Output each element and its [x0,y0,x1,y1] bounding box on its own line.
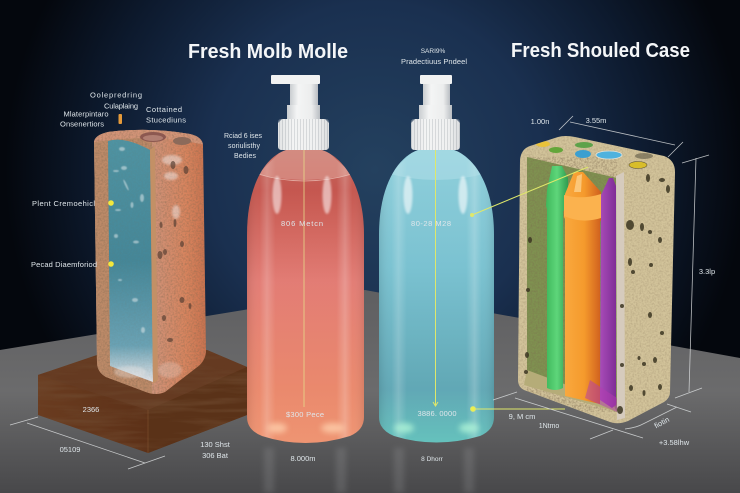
ceramic brick cross-section [94,130,206,394]
wooden base [38,350,247,453]
coloured tubes [546,166,617,412]
panel: brick sample on wooden base [10,90,247,469]
dimensions: wooden base [10,405,231,469]
dimension labels: fiotin [653,415,671,430]
bottle labels: $300 Pece [286,410,324,419]
callouts: brick [31,90,186,269]
top holes [536,141,653,168]
bottle labels: Pradectiuus Pndeel [401,57,467,66]
dimension labels: 9, M cm [509,412,535,421]
dimensions: wooden base: 05109 [60,445,80,454]
callouts: brick: Plent Cremoehicl [32,199,95,208]
bottle body [245,145,367,450]
dark speckles [524,174,670,414]
dimension labels: 3.3lp [699,267,715,276]
marker dots [108,200,114,267]
centre measure arrow [433,150,438,406]
bottle labels: SARI9% [421,48,445,55]
floor reflection [394,448,474,493]
side callout: Rciad 6 ises [224,133,262,140]
bottle labels: 8.000m [290,454,316,463]
bottle body [377,145,496,450]
callouts: brick: Mlaterpintaro [64,110,108,118]
leader line to case and dot [470,167,588,411]
panel: speckled shoulder case [470,116,715,447]
panel: blue pump bottle [377,48,496,493]
bottle labels: 80-28 M28 [411,219,451,228]
case shell [515,130,680,430]
floor reflection [264,448,346,493]
callouts: brick: Oolepredring [90,90,142,100]
callouts: brick: Onsenertiors [60,120,104,128]
dimension labels: 3.55m [586,116,606,125]
bottle labels [401,48,467,463]
bottle labels: 3886. 0000 [418,409,456,418]
dimension lines [493,116,709,439]
callouts: brick: Culaplaing [104,102,138,110]
dimensions: wooden base: 2366 [83,405,99,414]
orange marker chip [118,114,122,124]
centre measure line [303,150,305,407]
dimension labels [509,116,715,447]
callouts: brick: Pecad Diaemforiod [31,260,97,269]
callouts: brick: Stucediuns [146,116,186,124]
side callout [224,133,262,160]
panel: red pump bottle [224,75,367,493]
bottle labels: 8 Dhorr [421,456,444,463]
dimensions: wooden base: 130 Shst [200,440,231,449]
dimension labels: +3.58lhw [659,438,690,447]
dimensions: wooden base: 306 Bat [202,451,229,460]
side callout: soriulisthy [228,143,260,150]
pump cap [271,75,329,150]
dimension labels: 1Ntmo [539,423,559,430]
bottle labels: 806 Metcn [281,219,323,228]
bottle labels [281,219,324,463]
grey tabletop [0,290,740,493]
side callout: Bedies [234,153,256,160]
title: left: Fresh Molb Molle [188,41,348,63]
title: right: Fresh Shouled Case [511,40,690,62]
callouts: brick: Cottained [146,105,182,114]
pump cap [411,75,460,150]
dimension labels: 1.00n [531,117,549,126]
